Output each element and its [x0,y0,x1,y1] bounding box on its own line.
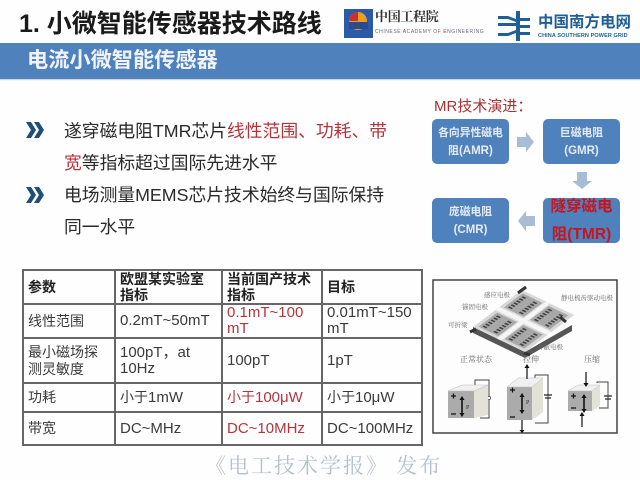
table: parameters comparison: mT [227,320,249,337]
piezo block: normal: P [466,405,470,411]
table: parameters comparison: 100pT，at [120,344,190,360]
MR evolution diagram [432,98,620,243]
chip labels [448,290,614,351]
bullet text 1: 遂穿磁电阻TMR芯片线性范围、功耗、带 [64,121,387,141]
section heading text: 电流小微智能传感器 [27,49,218,72]
box: CMR: 庞磁电阻 [449,206,492,218]
bullet list [26,121,387,237]
logo: Chinese Academy of Engineering: 中国工程院 [375,9,439,24]
state labels: 正常状态 [460,354,493,364]
box: GMR: (GMR) [564,145,599,157]
table: parameters comparison: 0.2mT~50mT [120,312,210,329]
icon: chevrons 2 [26,187,44,203]
table: parameters comparison: 0.1mT~100 [227,304,303,321]
box: CMR [432,198,509,243]
bullet text 2: 电场测量MEMS芯片技术始终与国际保持 [64,185,384,205]
box: TMR [543,198,620,243]
chip labels: 可折梁 [448,320,468,329]
box: GMR [543,119,620,164]
logo: Chinese Academy of Engineering [344,9,484,38]
table: parameters comparison: 1pT [327,352,353,368]
bullet text 2: 同一水平 [64,217,135,237]
piezo block: tension [507,364,552,433]
table: parameters comparison: 指标 [227,287,255,303]
chip structure [470,287,574,358]
state labels: 拉伸 [523,354,539,364]
table: parameters comparison: 指标 [120,287,148,303]
piezo block: compression [568,372,612,427]
arrow: TMR to CMR [518,211,535,231]
table: parameters comparison: 测灵敏度 [28,360,84,376]
box: TMR: 阻(TMR) [552,226,611,243]
table: parameters comparison: DC~10MHz [227,420,305,436]
box: AMR: 阻(AMR) [448,145,493,157]
chip labels: 屏蔽电极 [537,342,564,351]
chip labels: 感应电极 [484,290,510,299]
box: AMR: 各向异性磁电 [438,127,503,139]
table: parameters comparison: 目标 [327,279,355,295]
bullet text 1: 宽等指标超过国际先进水平 [64,153,277,173]
chip labels: 锚固电极 [462,302,488,311]
diagram heading: MR技术演进： [434,98,532,115]
box: CMR: (CMR) [454,224,487,236]
table: parameters comparison: 欧盟某实验室 [120,271,204,287]
box: AMR [432,119,509,164]
logo: Chinese Academy of Engineering: CHINESE ACADEMY OF ENGINEERING [375,29,484,35]
piezo block: normal [448,380,491,418]
table: parameters comparison: 功耗 [28,389,56,405]
table: parameters comparison [22,269,423,446]
chip labels: 静电梳齿驱动电极 [561,293,614,302]
table: parameters comparison: 10Hz [120,360,155,376]
table: parameters comparison: 小于100μW [227,389,303,406]
logo: China Southern Power Grid [498,11,631,41]
state labels: 压缩 [584,354,600,364]
logo: China Southern Power Grid: CHINA SOUTHERN POWER GRID [538,33,628,39]
box: TMR: 隧穿磁电 [550,198,612,215]
title: 1. 小微智能传感器技术路线 [19,10,322,38]
table: parameters comparison: 线性范围 [28,312,84,328]
table: parameters comparison: 小于10μW [327,389,394,406]
watermark caption: 《电工技术学报》 发布 [205,454,442,478]
box: GMR: 巨磁电阻 [560,127,603,139]
table: parameters comparison: mT [327,320,349,337]
table: parameters comparison: DC~MHz [120,420,181,436]
table: parameters comparison: 100pT [227,352,270,368]
table: parameters comparison: 最小磁场探 [28,344,98,360]
bullet text 1 [64,121,387,173]
table: parameters comparison: 参数 [28,279,56,295]
bullet text 2 [64,185,384,237]
section heading band [0,43,640,79]
arrow: GMR to TMR [572,172,592,189]
table: parameters comparison: DC~100MHz [327,420,413,436]
table: parameters comparison: 带宽 [28,420,56,436]
table: parameters comparison: 小于1mW [120,389,183,406]
table: parameters comparison: 0.01mT~150 [327,304,412,321]
logo: China Southern Power Grid: 中国南方电网 [538,14,631,31]
icon: chevrons 1 [26,122,44,138]
figure: MEMS sensor structure [432,279,618,434]
table: parameters comparison: 当前国产技术 [227,271,311,287]
state labels [460,354,600,364]
arrow: AMR to GMR [517,132,534,152]
piezo block: tension: P [526,400,530,406]
